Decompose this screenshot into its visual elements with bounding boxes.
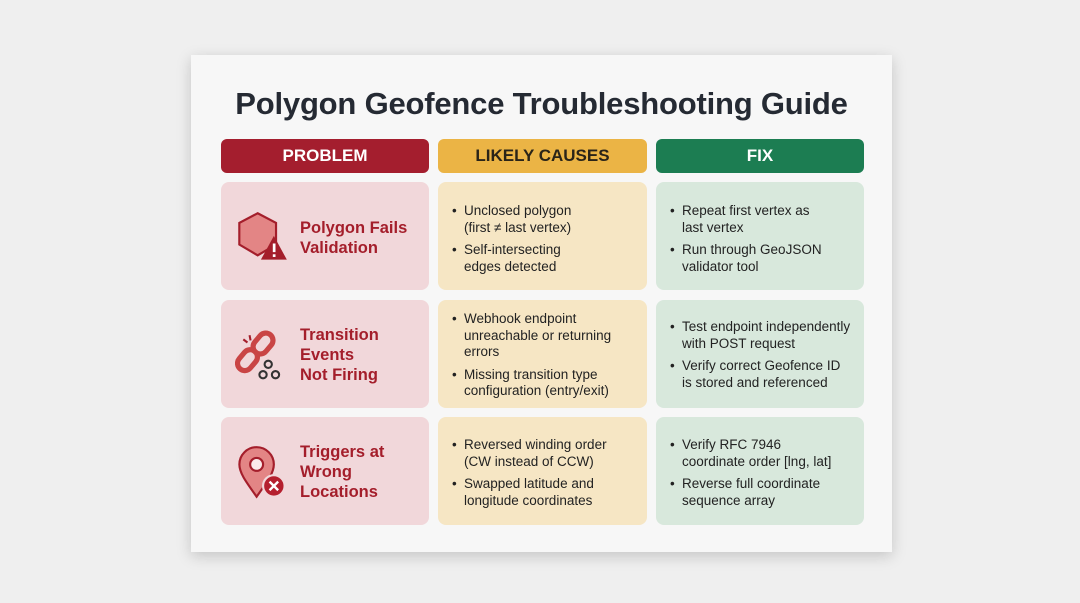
text: Validation bbox=[300, 239, 378, 257]
causes 2: Missing transition type bbox=[464, 366, 598, 382]
header: fix: FIX bbox=[747, 146, 773, 165]
text: Not Firing bbox=[300, 366, 378, 384]
header: likely causes bbox=[438, 139, 647, 173]
fix 1: validator tool bbox=[682, 258, 759, 274]
causes 2: errors bbox=[464, 344, 499, 359]
icon: hexagon warning bbox=[238, 212, 287, 260]
fix 2: Verify correct Geofence ID bbox=[682, 358, 840, 373]
causes 1: Unclosed polygon bbox=[464, 203, 571, 218]
text: Events bbox=[300, 346, 354, 364]
causes 1: edges detected bbox=[464, 258, 556, 274]
causes 3: (CW instead of CCW) bbox=[464, 454, 594, 468]
causes 3: longitude coordinates bbox=[464, 492, 592, 508]
problem 1 bbox=[221, 182, 429, 290]
title: Polygon Geofence Troubleshooting Guide bbox=[235, 86, 848, 121]
causes 2 bbox=[438, 300, 647, 408]
fix 3: sequence array bbox=[682, 492, 775, 508]
causes 2: unreachable or returning bbox=[464, 328, 611, 342]
causes 1: Self-intersecting bbox=[464, 242, 561, 257]
header: fix bbox=[656, 139, 864, 173]
problem 3 bbox=[221, 417, 429, 525]
causes 1 bbox=[438, 182, 647, 290]
fix 2 bbox=[656, 300, 864, 408]
text: Locations bbox=[300, 483, 378, 501]
text: Triggers at bbox=[300, 443, 384, 461]
fix 3: coordinate order [lng, lat] bbox=[682, 454, 831, 468]
fix 2: with POST request bbox=[682, 336, 795, 350]
icon: map pin error bbox=[238, 446, 284, 498]
text bbox=[300, 443, 384, 501]
text: Transition bbox=[300, 326, 379, 344]
causes 3 bbox=[438, 417, 647, 525]
fix 3: Verify RFC 7946 bbox=[682, 437, 781, 452]
fix 3 bbox=[656, 417, 864, 525]
icon: broken link bbox=[235, 330, 280, 380]
text: Polygon Fails bbox=[300, 219, 407, 237]
text: Wrong bbox=[300, 463, 352, 481]
header: likely causes: LIKELY CAUSES bbox=[475, 146, 610, 165]
causes 1: (first ≠ last vertex) bbox=[464, 220, 571, 234]
header: problem: PROBLEM bbox=[282, 146, 368, 165]
text bbox=[300, 326, 379, 384]
causes 3: Reversed winding order bbox=[464, 437, 607, 452]
fix 3: Reverse full coordinate bbox=[682, 476, 820, 491]
header: problem bbox=[221, 139, 429, 173]
causes 3: Swapped latitude and bbox=[464, 476, 594, 491]
causes 2: configuration (entry/exit) bbox=[464, 383, 609, 398]
problem 2 bbox=[221, 300, 429, 408]
fix 1: Run through GeoJSON bbox=[682, 242, 822, 257]
fix 1: last vertex bbox=[682, 220, 744, 234]
text bbox=[300, 219, 407, 257]
fix 2: is stored and referenced bbox=[682, 374, 828, 390]
causes 2: Webhook endpoint bbox=[464, 311, 576, 326]
fix 2: Test endpoint independently bbox=[682, 319, 850, 334]
fix 1: Repeat first vertex as bbox=[682, 203, 810, 218]
fix 1 bbox=[656, 182, 864, 290]
card bbox=[191, 55, 892, 552]
